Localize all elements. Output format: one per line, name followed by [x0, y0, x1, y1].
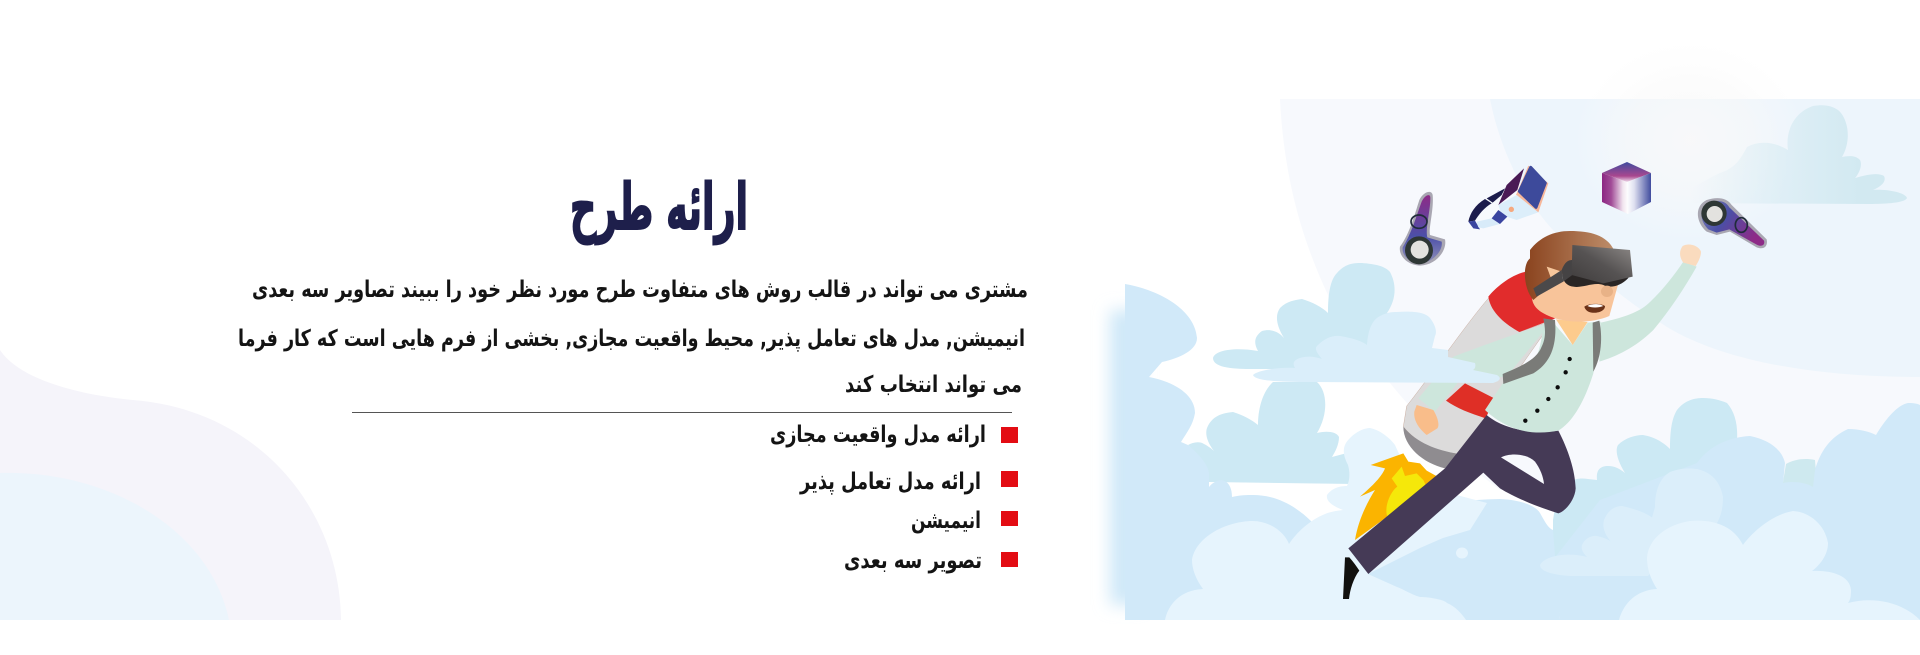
cloud bank: front pale layer: [1165, 428, 1920, 620]
small dot cloud: [1456, 548, 1468, 558]
VR controller right: [1698, 198, 1767, 248]
paragraph: انیمیشن, مدل های تعامل پذیر, محیط واقعیت مجازی, بخشی از فرم هایی است که کار فرما: [238, 326, 1025, 352]
cloud bank: back layer: [1110, 310, 1818, 605]
neck: [1556, 319, 1588, 345]
divider: [352, 412, 1012, 413]
list item 1: ارائه مدل واقعیت مجازی: [770, 422, 986, 448]
trousers: [1348, 415, 1576, 574]
list: [770, 422, 1018, 574]
VR headset icon: [1468, 166, 1548, 229]
small right green lobe: [1780, 459, 1818, 500]
shirt: [1418, 262, 1697, 433]
cube icon: [1602, 162, 1651, 214]
upper right cloud: [1660, 105, 1907, 204]
shirt buttons: [1523, 357, 1572, 423]
left background shape: pale blue: [0, 473, 229, 620]
character: VR jetpack flyer: [1343, 192, 1767, 599]
VR controller left: [1400, 192, 1445, 266]
shoe: [1343, 557, 1359, 599]
title: ارائه طرح: [570, 171, 748, 245]
cloud bank: mid light layer: [1540, 468, 1723, 576]
jetpack: [1403, 272, 1555, 468]
list item 4: تصویر سه بعدی: [844, 548, 982, 574]
upper-left back cloud: [1213, 263, 1420, 369]
cloud bank: main blue layer: [1125, 284, 1920, 620]
left background shape: lavender: [0, 350, 341, 620]
list item 2: ارائه مدل تعامل پذیر: [799, 469, 981, 495]
flame: [1355, 453, 1441, 540]
hands: [1414, 244, 1701, 435]
head: [1525, 231, 1633, 322]
front cloud over jetpack: [1253, 312, 1500, 383]
paragraph: می تواند انتخاب کند: [845, 372, 1022, 398]
right background panel: [1280, 40, 1920, 490]
list item 3: انیمیشن: [911, 508, 981, 534]
paragraph: مشتری می تواند در قالب روش های متفاوت طرح مورد نظر خود را ببیند تصاویر سه بعدی: [252, 277, 1028, 303]
backpack straps: [1503, 318, 1601, 384]
paragraph: [238, 277, 1028, 398]
